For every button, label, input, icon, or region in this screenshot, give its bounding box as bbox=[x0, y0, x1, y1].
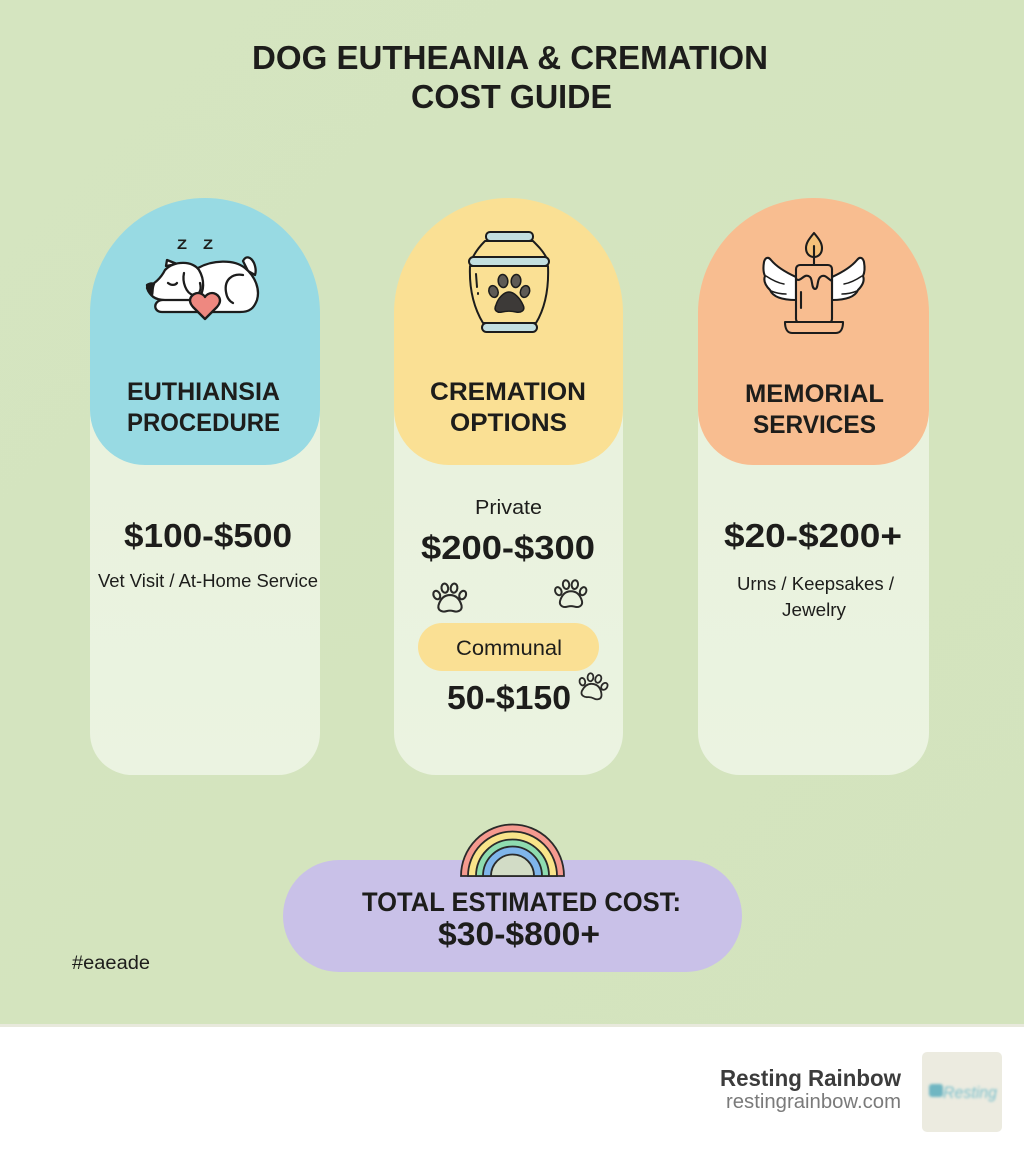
logo bbox=[922, 1052, 1002, 1132]
panel header bbox=[90, 198, 320, 465]
icon: z z: Z bbox=[177, 236, 188, 252]
icon: paw print small bbox=[575, 671, 611, 701]
panel heading bbox=[430, 378, 586, 437]
total label: TOTAL ESTIMATED COST: bbox=[362, 887, 681, 917]
icon: z z: Z bbox=[203, 236, 214, 252]
title: COST GUIDE bbox=[411, 79, 612, 116]
panel: euthanasia procedure bbox=[90, 198, 320, 775]
icon: paw print right bbox=[554, 580, 588, 607]
panel heading bbox=[127, 378, 280, 437]
panel heading bbox=[745, 380, 884, 439]
icon: z z bbox=[177, 236, 214, 252]
panel heading: OPTIONS bbox=[450, 409, 567, 437]
panel body bbox=[90, 300, 320, 775]
title bbox=[252, 40, 768, 116]
panel heading: SERVICES bbox=[753, 411, 876, 439]
description bbox=[737, 574, 894, 620]
icon: heart bbox=[190, 293, 220, 319]
panel heading: MEMORIAL bbox=[745, 380, 884, 408]
stray colour label: #eaeade bbox=[72, 953, 150, 974]
price: private: $200-$300 bbox=[421, 529, 595, 566]
brand name: Resting Rainbow bbox=[720, 1065, 901, 1091]
price: $100-$500 bbox=[124, 517, 292, 554]
communal pill: Communal bbox=[456, 637, 562, 660]
panel: cremation options bbox=[394, 198, 623, 775]
description: Urns / Keepsakes / bbox=[737, 574, 894, 594]
panel body bbox=[394, 300, 623, 775]
icon: paw print left bbox=[432, 583, 467, 612]
icon: urn with paw bbox=[469, 232, 549, 332]
panel header bbox=[394, 198, 623, 465]
brand url: restingrainbow.com bbox=[726, 1091, 901, 1113]
panel heading: PROCEDURE bbox=[127, 409, 280, 437]
panel: memorial services bbox=[698, 198, 929, 775]
description: Vet Visit / At-Home Service bbox=[98, 571, 318, 591]
icon: sleeping dog with heart bbox=[147, 257, 258, 319]
communal pill bbox=[418, 623, 599, 671]
icon: candle with wings bbox=[763, 233, 865, 333]
description: Jewelry bbox=[782, 600, 846, 620]
panel heading: CREMATION bbox=[430, 378, 586, 406]
label: private: Private bbox=[475, 497, 542, 519]
panel header bbox=[698, 198, 929, 465]
icon: urn paw print bbox=[487, 274, 531, 312]
title: DOG EUTHEANIA & CREMATION bbox=[252, 40, 768, 77]
total cost pill bbox=[283, 824, 742, 972]
icon: rainbow bbox=[461, 824, 564, 876]
price: $20-$200+ bbox=[724, 517, 902, 554]
panel body bbox=[698, 300, 929, 775]
total price: $30-$800+ bbox=[438, 916, 600, 952]
logo: Resting bbox=[943, 1083, 998, 1102]
footer band bbox=[0, 1024, 1024, 1154]
price: communal: 50-$150 bbox=[447, 679, 571, 716]
panel heading: EUTHIANSIA bbox=[127, 378, 280, 406]
